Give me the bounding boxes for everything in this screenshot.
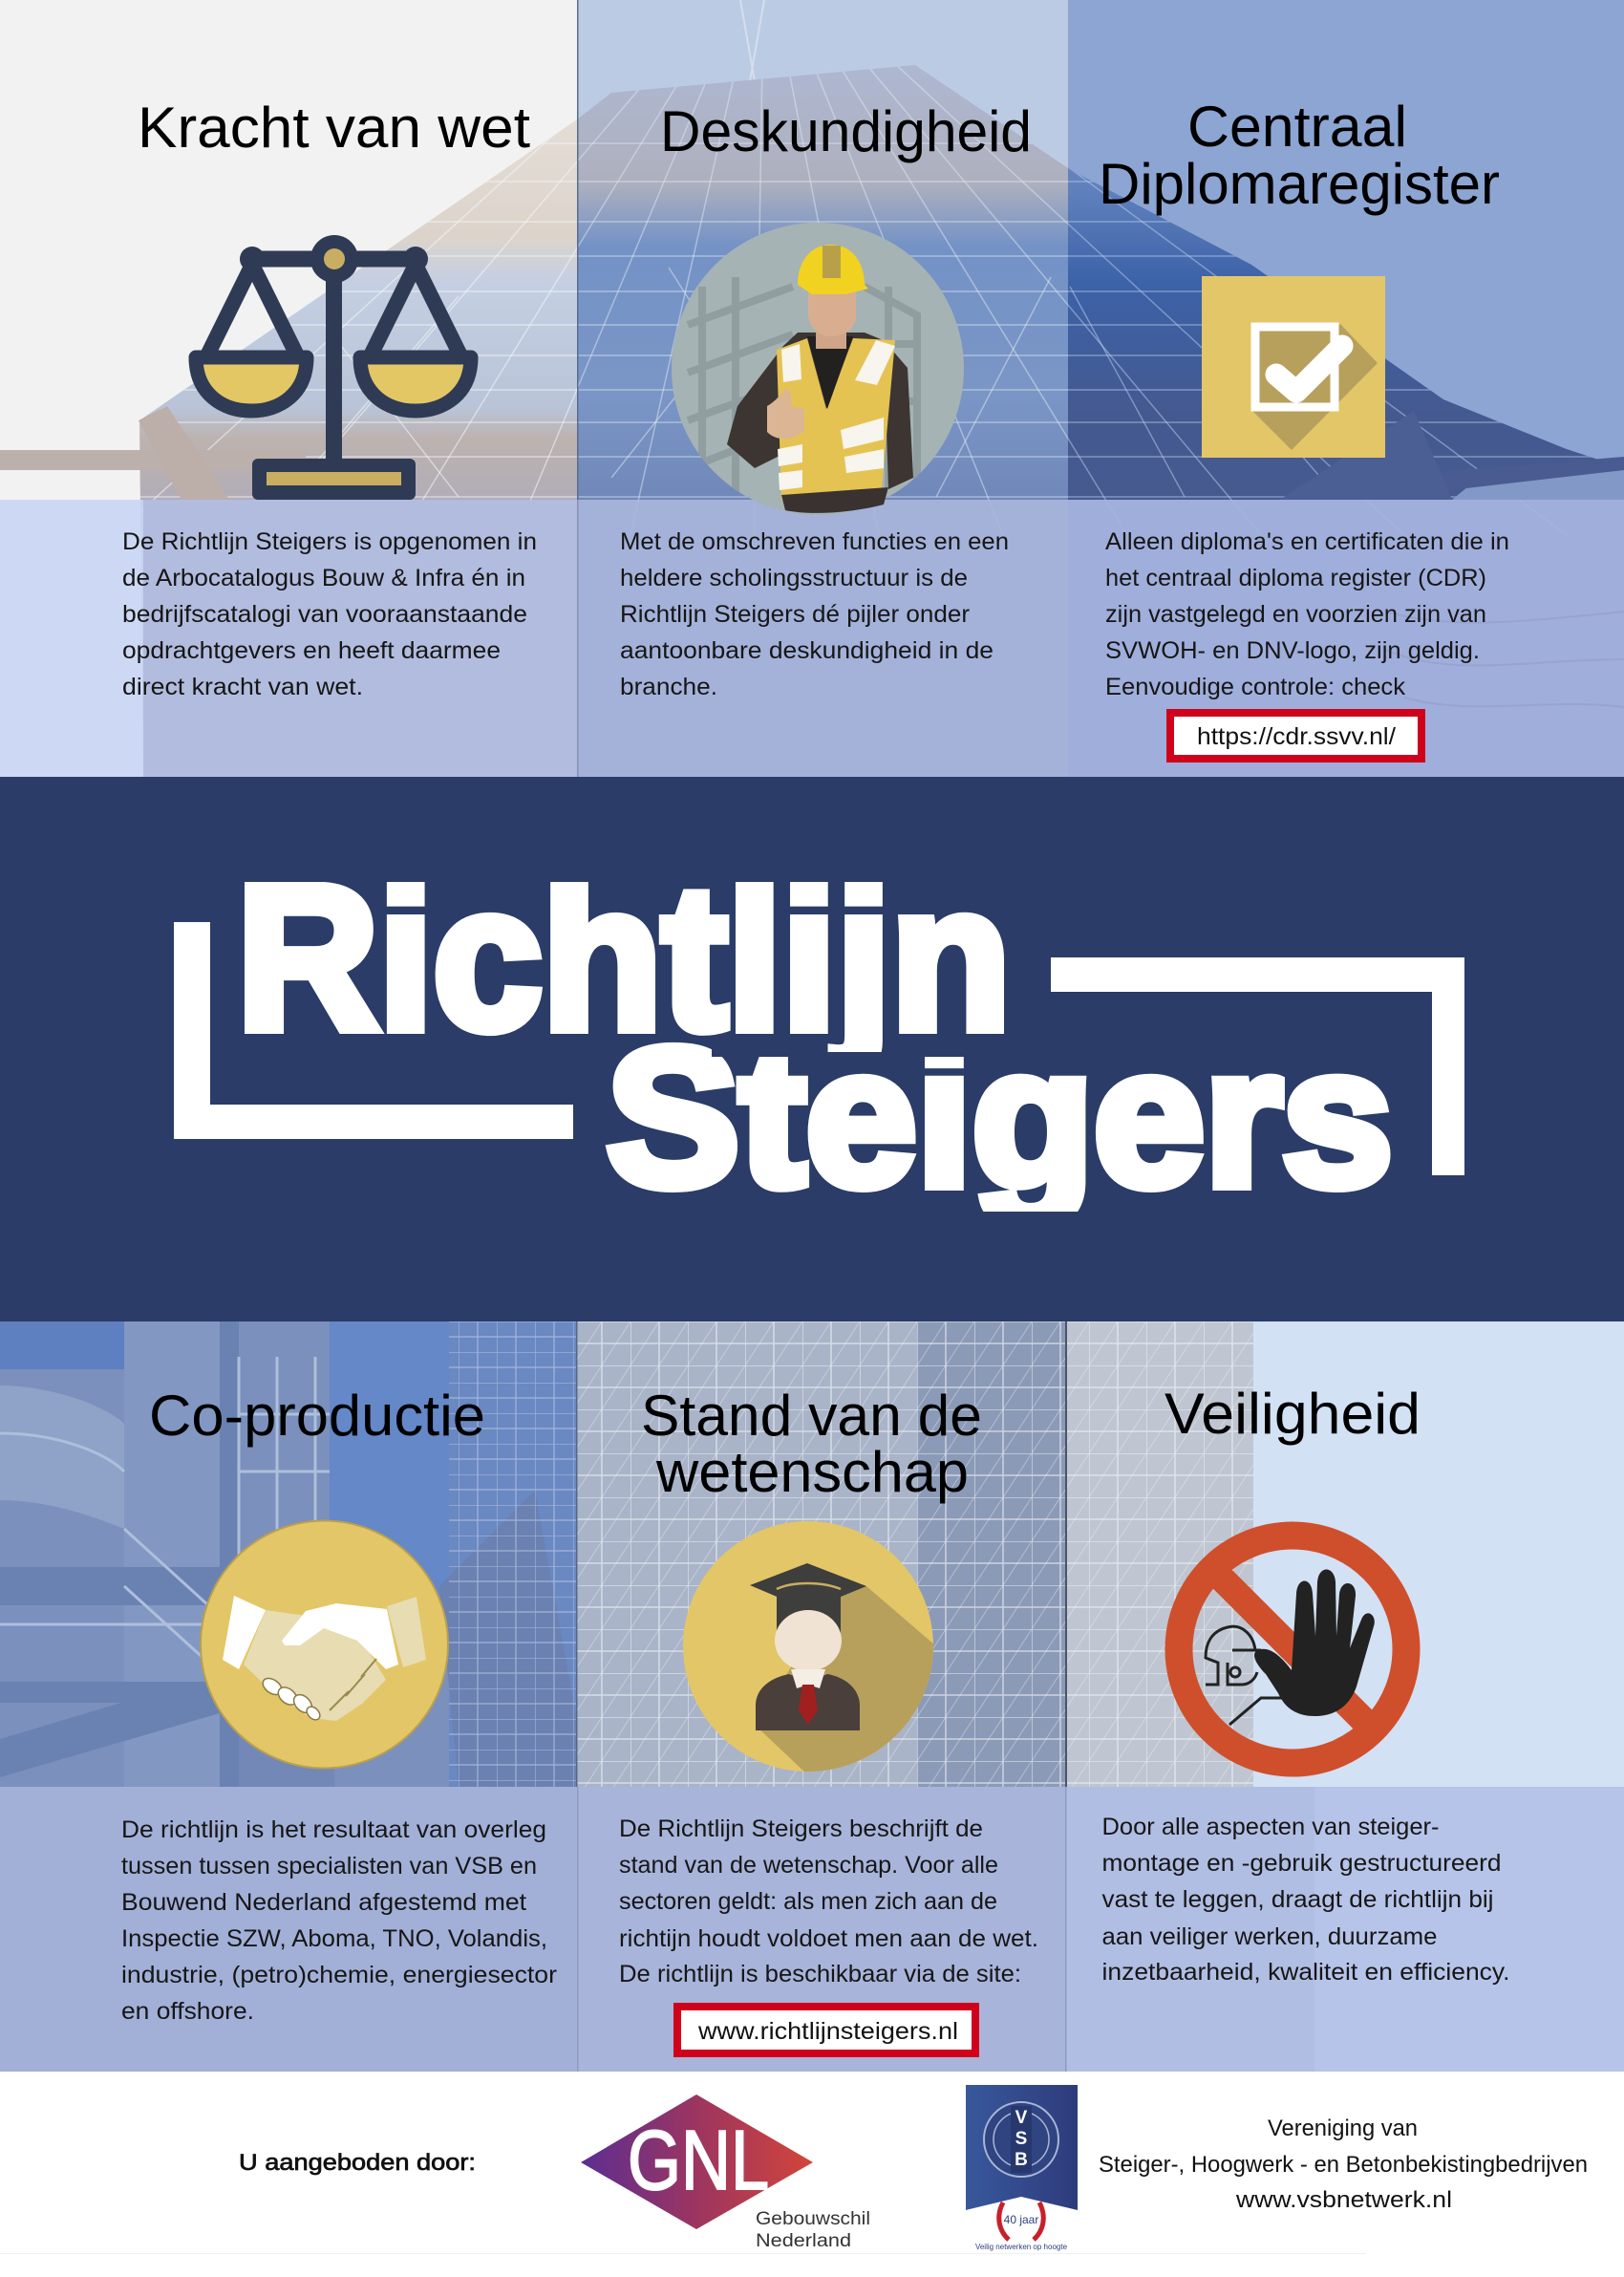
- footer text: Vereniging van: [1099, 2116, 1588, 2213]
- body text: Stand van de wetenschap: [619, 1815, 1038, 1987]
- logo: Richtlijn Steigers: [174, 882, 1464, 1212]
- icon: scales of justice: [196, 235, 471, 500]
- body text: Co-productie: industrie, (petro)chemie, energiesector: [121, 1962, 557, 1988]
- logo: VSB banner: 40 jaar: [1004, 2213, 1038, 2226]
- text bands: bottom row: [0, 1787, 1624, 2072]
- logo: VSB banner: [966, 2085, 1078, 2251]
- body text: Kracht van wet: opdrachtgevers en heeft daarmee: [122, 637, 501, 664]
- footer label: U aangeboden door: U aangeboden door:: [239, 2150, 476, 2176]
- icon: handshake: [201, 1521, 448, 1768]
- panel: Stand van de wetenschap: [619, 1384, 1038, 2053]
- link box: richtlijnsteigers.nl: [677, 2007, 975, 2053]
- body text: Stand van de wetenschap: De Richtlijn Steigers beschrijft de: [619, 1815, 983, 1842]
- heading: Kracht van wet: Kracht van wet: [138, 96, 530, 160]
- background photo: top scaffolded tower, three tinted columns: [0, 0, 1624, 777]
- panel: Centraal Diplomaregister: [1099, 95, 1509, 759]
- body text: Co-productie: Inspectie SZW, Aboma, TNO, Volandis,: [121, 1925, 547, 1952]
- logo: VSB banner: S: [1015, 2129, 1027, 2149]
- icon: no entry hand sign: [1179, 1536, 1406, 1763]
- heading: Centraal Diplomaregister: Centraal: [1187, 95, 1407, 159]
- body text: Co-productie: De richtlijn is het resultaat van overleg: [121, 1816, 546, 1843]
- body text: Centraal Diplomaregister: SVWOH- en DNV-logo, zijn geldig.: [1105, 637, 1480, 664]
- body text: Kracht van wet: De Richtlijn Steigers is opgenomen in: [122, 528, 537, 555]
- heading: Centraal Diplomaregister: Diplomaregister: [1099, 152, 1500, 216]
- body text: Centraal Diplomaregister: [1105, 528, 1509, 700]
- heading: Deskundigheid: Deskundigheid: [660, 99, 1032, 163]
- logo: VSB banner: B: [1015, 2150, 1028, 2170]
- logo: Richtlijn Steigers: Richtlijn: [237, 844, 1011, 1072]
- link box: cdr.ssvv.nl: https://cdr.ssvv.nl/: [1197, 723, 1396, 750]
- heading: Stand van de wetenschap: [641, 1384, 982, 1504]
- panel: Co-productie: [121, 1384, 557, 2025]
- heading: Centraal Diplomaregister: [1099, 95, 1500, 216]
- body text: Deskundigheid: [620, 528, 1009, 700]
- logo: GNL Gebouwschil Nederland: Gebouwschil: [756, 2209, 870, 2229]
- body text: Veiligheid: inzetbaarheid, kwaliteit en efficiency.: [1102, 1959, 1509, 1986]
- body text: Stand van de wetenschap: De richtlijn is beschikbaar via de site:: [619, 1961, 1021, 1987]
- footer text: Vereniging van: www.vsbnetwerk.nl: [1235, 2187, 1452, 2213]
- footer: [0, 2072, 1624, 2277]
- footer text: Vereniging van: Vereniging van: [1268, 2116, 1418, 2141]
- navy logo band: [0, 777, 1624, 1321]
- body text: Deskundigheid: aantoonbare deskundigheid in de: [620, 637, 994, 664]
- body text: Centraal Diplomaregister: Eenvoudige controle: check: [1105, 674, 1405, 700]
- body text: Kracht van wet: direct kracht van wet.: [122, 674, 363, 700]
- body text: Stand van de wetenschap: stand van de wetenschap. Voor alle: [619, 1852, 998, 1879]
- logo: VSB banner: V: [1015, 2108, 1028, 2128]
- body text: Kracht van wet: de Arbocatalogus Bouw & Infra én in: [122, 565, 525, 591]
- body text: Veiligheid: vast te leggen, draagt de richtlijn bij: [1102, 1886, 1494, 1913]
- logo: Richtlijn Steigers: Steigers: [607, 1008, 1393, 1227]
- body text: Centraal Diplomaregister: het centraal diploma register (CDR): [1105, 565, 1486, 591]
- body text: Co-productie: Bouwend Nederland afgestemd met: [121, 1889, 526, 1916]
- logo: GNL Gebouwschil Nederland: [581, 2094, 870, 2251]
- body text: Centraal Diplomaregister: zijn vastgelegd en voorzien zijn van: [1105, 601, 1486, 628]
- logo: VSB banner: Veilig netwerken op hoogte: [975, 2243, 1068, 2251]
- body text: Co-productie: tussen tussen specialisten van VSB en: [121, 1853, 537, 1880]
- icon: construction worker: [672, 223, 964, 515]
- link box: cdr.ssvv.nl: [1170, 713, 1421, 759]
- body text: Deskundigheid: branche.: [620, 674, 717, 700]
- icon: graduate: [683, 1521, 933, 1772]
- body text: Co-productie: en offshore.: [121, 1998, 254, 2025]
- link box: richtlijnsteigers.nl: www.richtlijnsteigers.nl: [697, 2018, 958, 2045]
- heading: Stand van de wetenschap: wetenschap: [655, 1440, 969, 1504]
- logo: GNL Gebouwschil Nederland: GNL: [628, 2113, 769, 2207]
- body text: Veiligheid: montage en -gebruik gestructureerd: [1102, 1850, 1502, 1877]
- logo: GNL Gebouwschil Nederland: Nederland: [756, 2231, 851, 2251]
- body text: Veiligheid: [1102, 1814, 1509, 1986]
- body text: Veiligheid: aan veiliger werken, duurzame: [1102, 1923, 1437, 1950]
- body text: Deskundigheid: Richtlijn Steigers dé pijler onder: [620, 601, 970, 628]
- body text: Deskundigheid: Met de omschreven functies en een: [620, 528, 1009, 555]
- text bands: top row: [0, 500, 1624, 777]
- body text: Kracht van wet: [122, 528, 537, 700]
- body text: Stand van de wetenschap: richtijn houdt voldoet men aan de wet.: [619, 1925, 1038, 1952]
- heading: Stand van de wetenschap: Stand van de: [641, 1384, 982, 1448]
- footer text: Vereniging van: Steiger-, Hoogwerk - en Betonbekistingbedrijven: [1099, 2152, 1588, 2178]
- body text: Centraal Diplomaregister: Alleen diploma's en certificaten die in: [1105, 528, 1509, 555]
- body text: Stand van de wetenschap: sectoren geldt: als men zich aan de: [619, 1888, 997, 1915]
- panel: Deskundigheid: [620, 99, 1032, 700]
- panel: Kracht van wet: [122, 96, 537, 700]
- background photo: bottom refinery and scaffolding: [0, 1321, 1624, 1787]
- icon: checkbox: [1202, 276, 1385, 458]
- body text: Kracht van wet: bedrijfscatalogi van vooraanstaande: [122, 601, 527, 628]
- heading: Veiligheid: Veiligheid: [1165, 1382, 1421, 1446]
- heading: Co-productie: Co-productie: [149, 1384, 485, 1448]
- panel: Veiligheid: [1102, 1382, 1509, 1986]
- body text: Deskundigheid: heldere scholingsstructuur is de: [620, 565, 968, 591]
- body text: Co-productie: [121, 1816, 557, 2025]
- body text: Veiligheid: Door alle aspecten van steiger-: [1102, 1814, 1439, 1840]
